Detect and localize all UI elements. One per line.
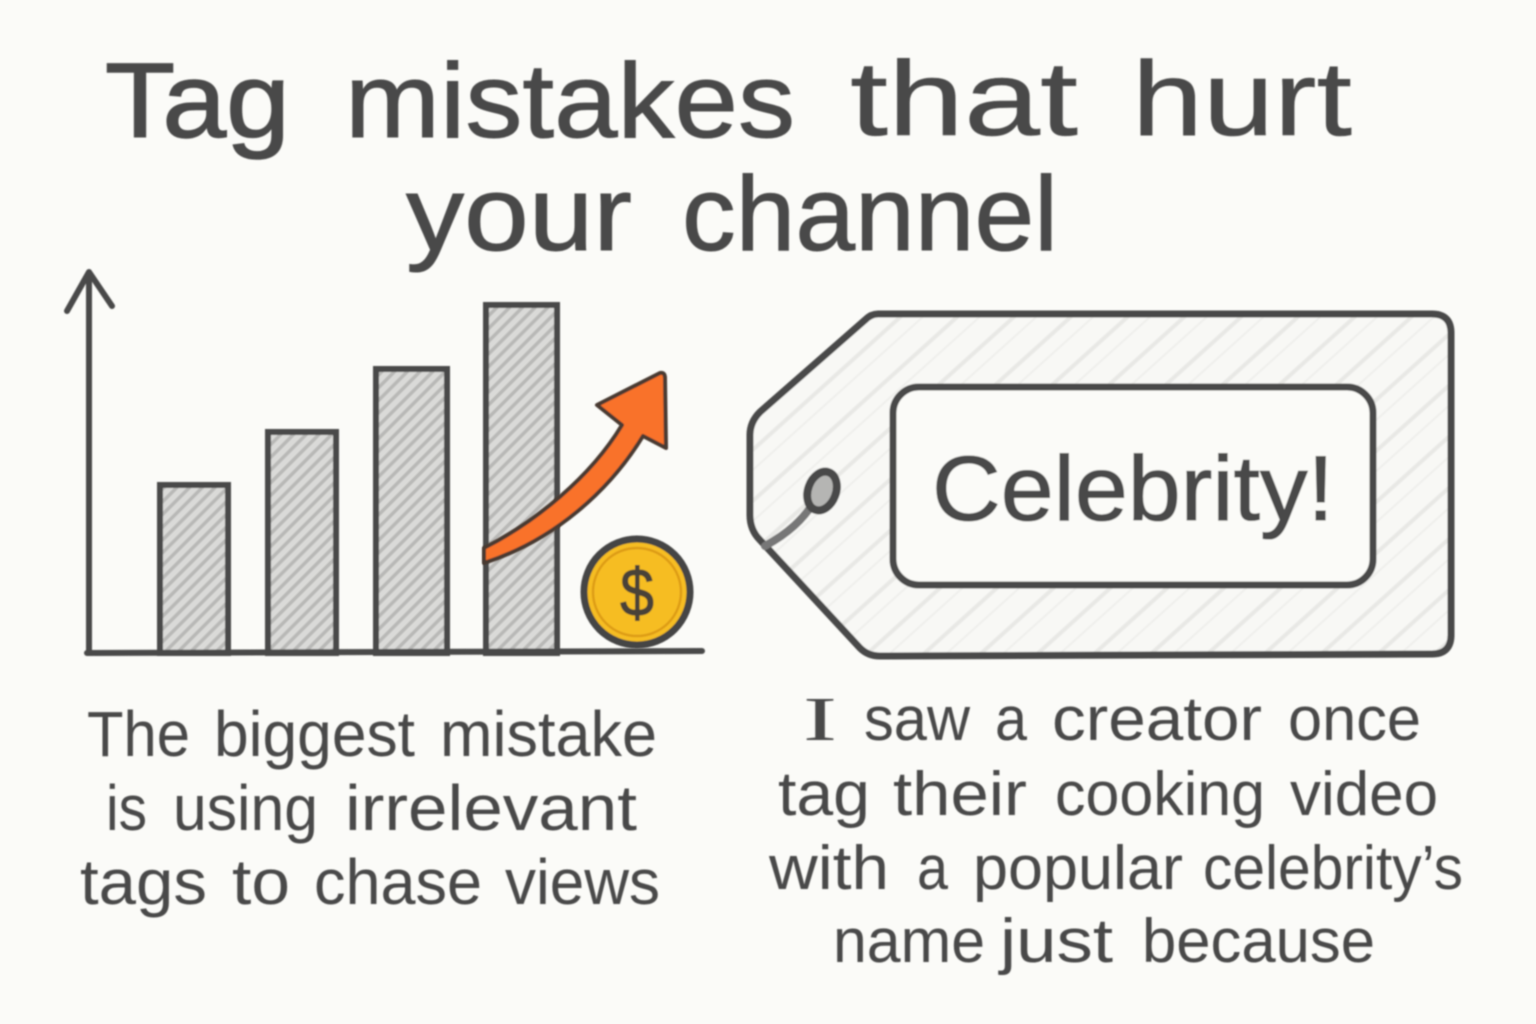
tag label box — [893, 387, 1373, 585]
title: channel — [682, 155, 1058, 273]
bar 1 — [160, 485, 228, 653]
left caption: The — [87, 698, 190, 770]
bar 3 — [376, 369, 447, 653]
left caption: irrelevant — [345, 772, 637, 844]
right caption: celebrity’s — [1203, 834, 1463, 903]
tag hole — [802, 467, 842, 515]
left caption — [80, 698, 660, 918]
right caption: a — [995, 685, 1027, 754]
left caption: views — [505, 846, 660, 918]
bar 4 — [486, 305, 557, 653]
left caption: tags — [80, 846, 207, 918]
tag label text: Celebrity! — [932, 438, 1334, 540]
bar chart — [67, 272, 702, 653]
bar 2 — [268, 432, 336, 653]
left caption: chase — [314, 846, 482, 918]
left caption: to — [232, 846, 290, 918]
right caption: with — [768, 834, 889, 903]
left caption: is — [106, 772, 147, 844]
right caption: saw — [864, 685, 970, 754]
title — [105, 40, 1352, 273]
title: that — [850, 40, 1078, 158]
title: mistakes — [345, 42, 795, 160]
chart axes — [67, 272, 702, 653]
right caption — [768, 685, 1463, 976]
left caption: biggest — [214, 698, 415, 770]
left caption: using — [173, 772, 318, 844]
right caption: just — [998, 907, 1113, 976]
icon: gold dollar coin: $ — [620, 555, 654, 631]
right caption: tag — [778, 760, 870, 829]
right caption: name — [833, 907, 985, 976]
right caption: cooking — [1055, 760, 1265, 829]
title: Tag — [105, 42, 290, 160]
icon: price tag — [750, 314, 1451, 656]
right caption: a — [917, 834, 948, 903]
right caption: popular — [973, 834, 1183, 903]
right caption: creator — [1052, 685, 1262, 754]
tag string — [765, 495, 818, 546]
right caption: video — [1290, 760, 1438, 829]
icon: orange rising arrow — [484, 373, 666, 563]
right caption: because — [1142, 907, 1375, 976]
title: hurt — [1132, 40, 1352, 158]
left caption: mistake — [440, 698, 657, 770]
right caption: I — [803, 686, 837, 754]
icon: gold dollar coin — [584, 539, 690, 645]
title: your — [406, 155, 632, 273]
right caption: their — [893, 760, 1027, 829]
right caption: once — [1288, 685, 1421, 754]
